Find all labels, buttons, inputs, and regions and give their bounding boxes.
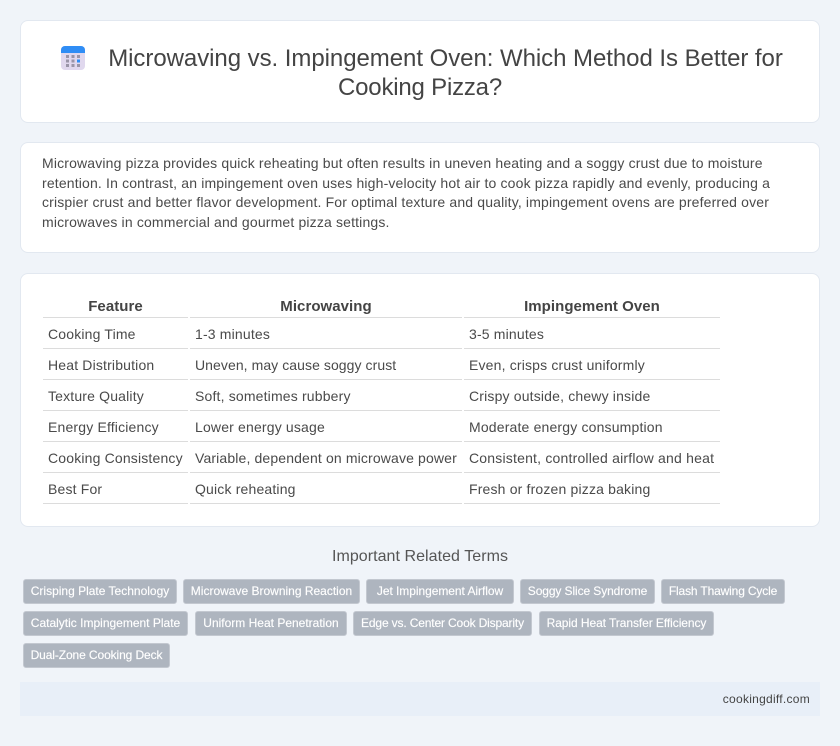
comparison table: [43, 298, 720, 504]
comparison table: Microwaving: [280, 298, 372, 315]
panel: comparison table: [20, 273, 820, 527]
comparison table: Best For: [48, 481, 102, 497]
tag list: Crisping Plate Technology: [31, 584, 169, 598]
intro paragraph: crispier crust and better flavor development. For optimal texture and quality, impingement ovens are preferred over: [42, 194, 769, 210]
tag list: Soggy Slice Syndrome: [528, 584, 647, 598]
comparison table: Cooking Consistency: [48, 450, 183, 466]
comparison table: Cooking Time: [48, 326, 136, 342]
tag list: Uniform Heat Penetration: [203, 616, 339, 630]
comparison table: Uneven, may cause soggy crust: [195, 357, 396, 373]
intro paragraph: [42, 155, 770, 230]
tag list: Microwave Browning Reaction: [191, 584, 352, 598]
comparison table: 3-5 minutes: [469, 326, 544, 342]
tag list: [23, 579, 785, 668]
comparison table: Heat Distribution: [48, 357, 154, 373]
footer source: cookingdiff.com: [723, 692, 810, 706]
comparison table: Lower energy usage: [195, 419, 325, 435]
title: Microwaving vs. Impingement Oven: Which Method Is Better for: [108, 45, 783, 72]
comparison table: Fresh or frozen pizza baking: [469, 481, 650, 497]
comparison table: Soft, sometimes rubbery: [195, 388, 351, 404]
title: Cooking Pizza?: [338, 74, 502, 101]
comparison table: Quick reheating: [195, 481, 296, 497]
tag list: Edge vs. Center Cook Disparity: [361, 616, 524, 630]
comparison table: Energy Efficiency: [48, 419, 159, 435]
comparison table: Consistent, controlled airflow and heat: [469, 450, 714, 466]
comparison table: Variable, dependent on microwave power: [195, 450, 457, 466]
icon: calendar: [61, 46, 85, 70]
tag list: Dual-Zone Cooking Deck: [31, 648, 162, 662]
panel: title card: [20, 20, 820, 123]
intro paragraph: retention. In contrast, an impingement oven uses high-velocity hot air to cook pizza rapidly and evenly, producing a: [42, 175, 770, 191]
comparison table: Moderate energy consumption: [469, 419, 663, 435]
heading: related terms: Important Related Terms: [332, 548, 508, 565]
tag list: Jet Impingement Airflow: [377, 584, 503, 598]
tag list: Rapid Heat Transfer Efficiency: [547, 616, 706, 630]
panel: intro text: [20, 142, 820, 253]
tag list: Flash Thawing Cycle: [669, 584, 777, 598]
comparison table: 1-3 minutes: [195, 326, 270, 342]
intro paragraph: Microwaving pizza provides quick reheating but often results in uneven heating and a soggy crust due to moisture: [42, 155, 763, 171]
comparison table: Crispy outside, chewy inside: [469, 388, 650, 404]
comparison table: Texture Quality: [48, 388, 144, 404]
comparison table: Feature: [88, 298, 143, 315]
comparison table: Impingement Oven: [524, 298, 660, 315]
title: [108, 45, 783, 101]
footer bar: [20, 682, 820, 716]
comparison table: Even, crisps crust uniformly: [469, 357, 645, 373]
intro paragraph: microwaves in commercial and gourmet pizza settings.: [42, 214, 390, 230]
tag list: Catalytic Impingement Plate: [31, 616, 180, 630]
